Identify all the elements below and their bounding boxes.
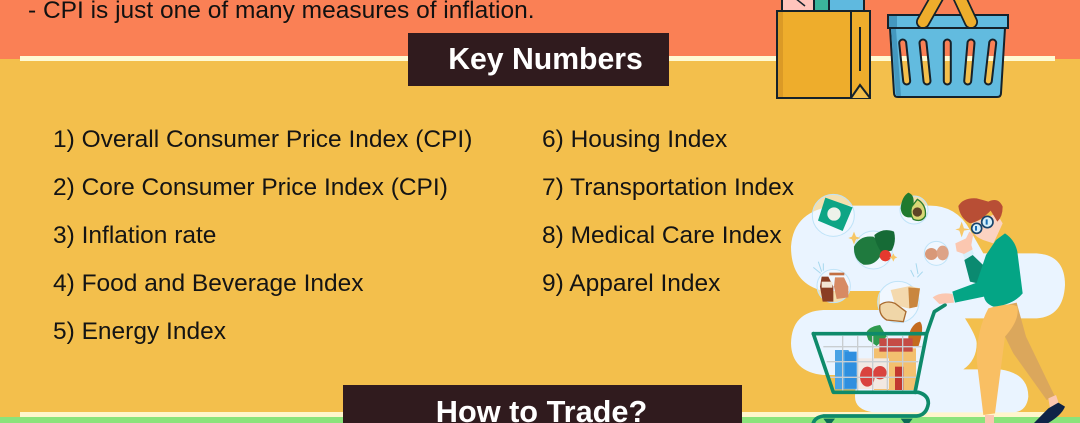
hair (958, 198, 1003, 223)
icon: blue shopping basket (887, 0, 1009, 98)
item 5: 5) Energy Index (53, 318, 226, 345)
divider: top cream line (20, 56, 1055, 61)
background: orange band (0, 0, 1080, 59)
cart grid (823, 336, 922, 391)
item 1: 1) Overall Consumer Price Index (CPI) (53, 126, 472, 153)
icon: paper shopping bag (776, 0, 871, 99)
sauce bottles (820, 277, 833, 302)
item 9: 9) Apparel Index (542, 270, 720, 297)
list: key numbers column two (542, 126, 794, 297)
background: green band (0, 417, 1080, 423)
raised sleeve (964, 255, 988, 284)
heading: How to Trade? (343, 385, 742, 423)
sparkles (848, 222, 971, 262)
item 6: 6) Housing Index (542, 126, 727, 153)
avocado (901, 193, 914, 217)
bread (891, 286, 920, 308)
cart wheels (823, 419, 913, 423)
head (972, 213, 1003, 243)
heading: Key Numbers (408, 33, 669, 86)
thumbs up hand (955, 232, 973, 254)
cart frame (813, 305, 945, 423)
illustration: shopper with cart (791, 192, 1065, 423)
greens and tomato (854, 236, 881, 265)
sparks (813, 262, 923, 277)
food package (818, 198, 853, 231)
cuff (963, 248, 974, 259)
cloud background (791, 206, 1065, 412)
list: key numbers column one (53, 126, 472, 345)
divider: bottom cream line (20, 412, 1055, 417)
shopper legs (990, 303, 1055, 400)
item 3: 3) Inflation rate (53, 222, 216, 249)
item 7: 7) Transportation Index (542, 174, 794, 201)
glasses (972, 216, 993, 233)
hand on cart (933, 293, 954, 304)
item 2: 2) Core Consumer Price Index (CPI) (53, 174, 448, 201)
cart contents (866, 325, 887, 346)
food bubbles (812, 194, 948, 323)
eyes (976, 219, 987, 231)
eggs (925, 248, 938, 260)
item 4: 4) Food and Beverage Index (53, 270, 364, 297)
item 8: 8) Medical Care Index (542, 222, 782, 249)
torso and arm (952, 233, 1023, 307)
heading: Key Numbers: Key Numbers (448, 43, 643, 76)
shoe (1034, 403, 1065, 423)
